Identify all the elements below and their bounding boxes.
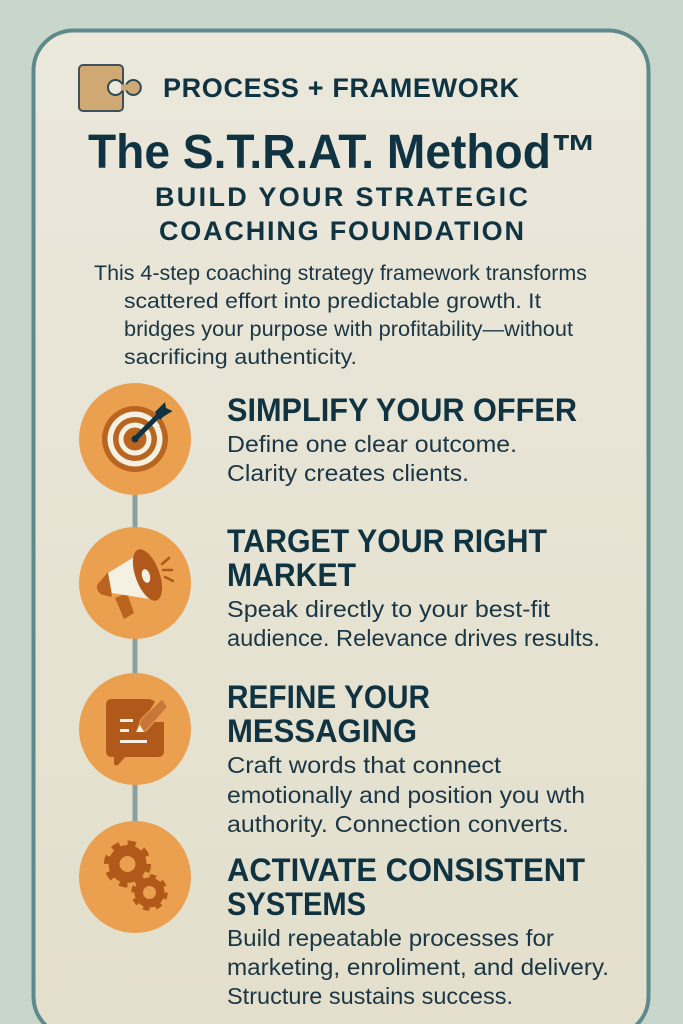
icon: megaphone — [79, 527, 191, 639]
icon: target — [79, 383, 191, 495]
step 3: refine your messaging: emotionally and position you wth — [227, 782, 585, 808]
intro text: scattered effort into predictable growth. It — [124, 289, 541, 313]
step 2: target your right market: audience. Relevance drives results. — [227, 625, 600, 651]
step 4: activate consistent systems: ACTIVATE CONSISTENT — [227, 852, 585, 888]
step 2: target your right market — [227, 523, 600, 651]
subtitle: COACHING FOUNDATION — [159, 216, 524, 246]
step 1: simplify your offer: SIMPLIFY YOUR OFFER — [227, 392, 577, 428]
icon: gears — [79, 821, 191, 933]
step 1: simplify your offer: Clarity creates clients. — [227, 460, 469, 486]
step 1: simplify your offer: Define one clear outcome. — [227, 431, 517, 457]
intro text: This 4-step coaching strategy framework transforms — [94, 261, 587, 285]
icon: message and pencil — [79, 673, 191, 785]
step 3: refine your messaging — [227, 679, 585, 837]
subtitle — [155, 182, 528, 246]
step 4: activate consistent systems: Structure sustains success. — [227, 983, 513, 1009]
step 4: activate consistent systems — [227, 852, 609, 1009]
step 3: refine your messaging: MESSAGING — [227, 713, 417, 749]
intro text — [94, 261, 587, 369]
subtitle: BUILD YOUR STRATEGIC — [155, 182, 528, 212]
step 4: activate consistent systems: SYSTEMS — [227, 886, 366, 922]
intro text: sacrificing authenticity. — [124, 345, 357, 369]
timeline connector — [132, 490, 138, 830]
step 2: target your right market: MARKET — [227, 557, 356, 593]
step 3: refine your messaging: authority. Connection converts. — [227, 811, 569, 837]
icon: puzzle piece — [79, 65, 141, 111]
step 4: activate consistent systems: marketing, enroliment, and delivery. — [227, 954, 609, 980]
title: The S.T.R.AT. Method™ — [88, 126, 597, 179]
step 3: refine your messaging: REFINE YOUR — [227, 679, 430, 715]
step 4: activate consistent systems: Build repeatable processes for — [227, 925, 554, 951]
intro text: bridges your purpose with profitability—without — [124, 317, 573, 341]
step 2: target your right market: TARGET YOUR RIGHT — [227, 523, 547, 559]
step 3: refine your messaging: Craft words that connect — [227, 752, 502, 778]
step 1: simplify your offer — [227, 392, 577, 486]
step 2: target your right market: Speak directly to your best-fit — [227, 596, 550, 622]
eyebrow heading: PROCESS + FRAMEWORK — [163, 73, 520, 103]
